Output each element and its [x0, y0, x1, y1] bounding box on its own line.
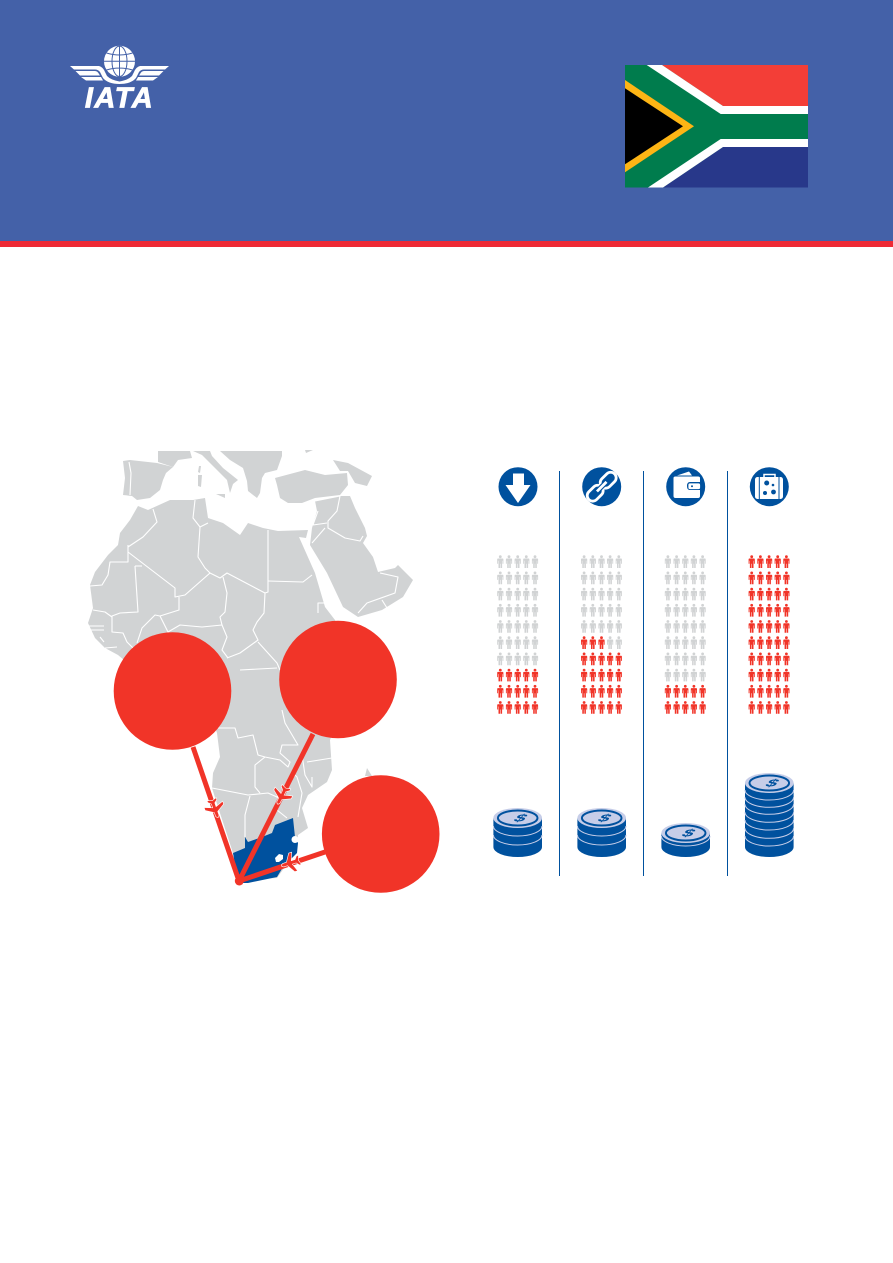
icon: down arrow: [498, 467, 538, 506]
route to middle circle: [239, 734, 313, 881]
people chart column 2: [581, 555, 622, 714]
icon: wallet: [666, 467, 705, 506]
icon: suitcase: [750, 467, 789, 506]
route lines: [193, 734, 325, 886]
plane icon right: [279, 851, 302, 875]
route to left circle: [193, 747, 239, 881]
land masses: [88, 450, 413, 880]
plane icon middle: [269, 783, 295, 808]
IATA logo: [70, 46, 169, 114]
coin stack column 2: [577, 808, 626, 857]
logo wordmark: IATA: [85, 82, 154, 114]
Lesotho: [275, 854, 283, 862]
people chart column 1: [497, 555, 538, 714]
people chart column 4: [749, 555, 790, 714]
logo globe: [104, 46, 135, 77]
header band: [0, 0, 893, 241]
column dividers: [560, 471, 728, 876]
route to right circle: [239, 852, 325, 881]
left red circle: [114, 632, 231, 750]
coin stack column 4: [745, 773, 794, 857]
infographic canvas: [0, 0, 893, 893]
logo wings: [70, 66, 169, 84]
icon: chain link: [582, 467, 621, 506]
dollar sign: $: [678, 827, 700, 839]
coin stack column 1: [493, 808, 542, 857]
header red rule: [0, 241, 893, 247]
dollar sign: $: [510, 812, 532, 824]
South Africa highlight: [233, 818, 298, 883]
people chart column 3: [665, 555, 706, 714]
Eswatini: [292, 836, 298, 843]
map of Africa and the Middle East: [88, 450, 413, 883]
plane icon left: [203, 796, 227, 820]
middle red circle: [279, 621, 397, 738]
coin stack column 3: [661, 823, 710, 857]
right red circle: [322, 775, 440, 893]
dollar sign: $: [762, 777, 783, 789]
South African flag: [625, 65, 808, 188]
country borders: [88, 462, 398, 837]
dollar sign: $: [594, 812, 616, 824]
origin point: [235, 876, 244, 886]
